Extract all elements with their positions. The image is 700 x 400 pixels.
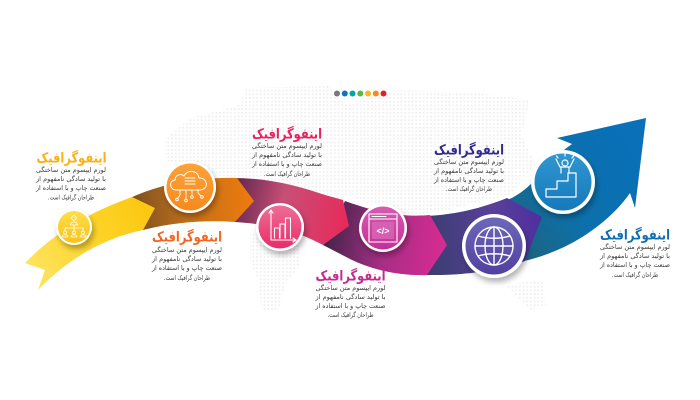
text block: magenta: اینفوگرافیک xyxy=(316,268,386,284)
text block: navy: با تولید سادگی نامفهوم از xyxy=(433,167,504,175)
icon: globe xyxy=(475,227,513,265)
node: success stairs icon xyxy=(531,150,595,214)
icon: bar chart xyxy=(269,210,296,242)
segment: orange xyxy=(128,178,254,230)
text block: navy: طراحان گرافیک است. xyxy=(446,185,492,193)
text block: orange: طراحان گرافیک است. xyxy=(164,274,210,282)
text block: navy: اینفوگرافیک xyxy=(434,142,504,158)
arrow ribbon xyxy=(25,118,646,290)
text block: orange: صنعت چاپ و با استفاده از xyxy=(151,264,222,272)
text block: yellow: با تولید سادگی نامفهوم از xyxy=(35,175,106,183)
icon: org chart xyxy=(62,216,86,237)
text block: navy: صنعت چاپ و با استفاده از xyxy=(433,176,504,184)
text block: magenta: صنعت چاپ و با استفاده از xyxy=(315,302,386,310)
text block: red: طراحان گرافیک است. xyxy=(264,170,310,178)
text block: magenta: طراحان گرافیک است. xyxy=(328,311,374,319)
text block: red: با تولید سادگی نامفهوم از xyxy=(251,151,322,159)
text block: red xyxy=(251,126,322,178)
text block: yellow: لورم ایپسوم متن ساختگی xyxy=(36,166,106,174)
text block: orange: با تولید سادگی نامفهوم از xyxy=(151,255,222,263)
segment: purple xyxy=(425,198,542,275)
text block: magenta: با تولید سادگی نامفهوم از xyxy=(315,293,386,301)
text block: navy xyxy=(433,142,504,193)
text block: orange xyxy=(151,228,222,282)
text block: red: لورم ایپسوم متن ساختگی xyxy=(252,142,322,150)
text block: magenta: لورم ایپسوم متن ساختگی xyxy=(316,284,386,292)
node: cloud icon xyxy=(164,161,216,213)
color dots row xyxy=(334,90,386,96)
text block: yellow: صنعت چاپ و با استفاده از xyxy=(35,184,106,192)
text block: red: صنعت چاپ و با استفاده از xyxy=(251,160,322,168)
text block: orange: لورم ایپسوم متن ساختگی xyxy=(152,246,222,254)
icon: person on stairs xyxy=(546,154,576,197)
text block: red: اینفوگرافیک xyxy=(252,126,322,142)
node: code icon xyxy=(359,204,407,252)
segment: yellow tail xyxy=(25,197,155,290)
text block: magenta xyxy=(315,268,386,319)
text block: yellow: اینفوگرافیک xyxy=(36,150,106,166)
node: globe icon xyxy=(462,214,526,278)
text block: orange: اینفوگرافیک xyxy=(152,228,222,246)
text block: navy: لورم ایپسوم متن ساختگی xyxy=(434,158,504,166)
segment: magenta xyxy=(323,201,447,275)
segment: blue arrowhead xyxy=(505,118,646,263)
text block: blue: طراحان گرافیک است. xyxy=(612,271,658,279)
text block: blue xyxy=(599,226,670,279)
node: bar chart icon xyxy=(256,203,304,251)
segment: red xyxy=(232,178,349,245)
background: dotted world map xyxy=(165,86,546,312)
node: network icon xyxy=(56,209,92,245)
text block: blue: لورم ایپسوم متن ساختگی xyxy=(600,243,670,251)
text block: yellow xyxy=(35,150,106,202)
text block: yellow: طراحان گرافیک است. xyxy=(48,194,94,202)
text block: blue: صنعت چاپ و با استفاده از xyxy=(599,261,670,269)
icon: cloud circuit xyxy=(171,171,206,202)
text block: blue: اینفوگرافیک xyxy=(600,226,670,244)
text block: blue: با تولید سادگی نامفهوم از xyxy=(599,252,670,260)
icon: code window: </> xyxy=(376,226,390,236)
